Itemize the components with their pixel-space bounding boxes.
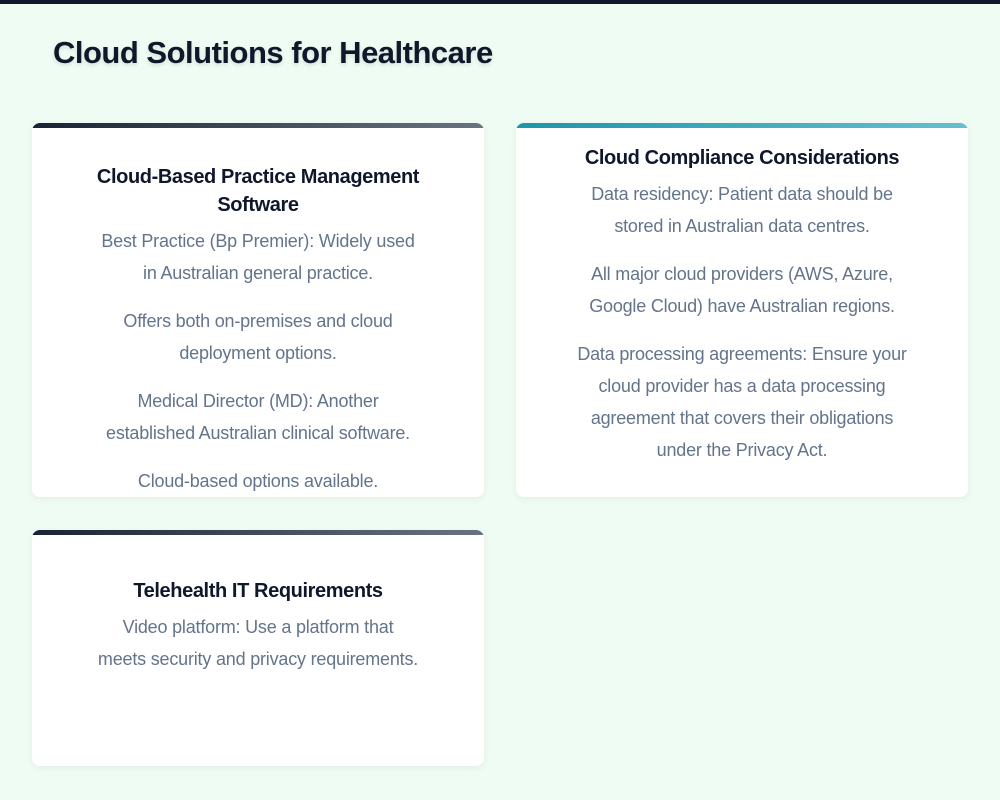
text: data residency: Data residency: Patient data should be — [591, 184, 893, 204]
heading: practice management: Cloud-Based Practice Management — [97, 166, 419, 188]
text: agreements: Data processing agreements: Ensure your — [577, 344, 907, 364]
panel: practice management — [32, 123, 484, 497]
heading: practice management — [97, 166, 420, 216]
title: Cloud Solutions for Healthcare — [53, 35, 493, 70]
text: Medical Director: Medical Director (MD): Another — [137, 391, 379, 411]
text: deployment: deployment options. — [179, 343, 337, 363]
text: video platform — [98, 617, 418, 669]
text: data residency — [591, 184, 893, 236]
text: Bp Premier — [101, 231, 415, 283]
text: cloud options: Cloud-based options available. — [138, 471, 378, 491]
text: data residency: stored in Australian data centres. — [614, 216, 870, 236]
text: deployment: Offers both on-premises and cloud — [123, 311, 393, 331]
panel: compliance — [516, 123, 968, 497]
text: video platform: Video platform: Use a platform that — [123, 617, 393, 637]
text: video platform: meets security and privacy requirements. — [98, 649, 418, 669]
text: Bp Premier: in Australian general practice. — [143, 263, 373, 283]
text: agreements — [577, 344, 907, 460]
text: providers: Google Cloud) have Australian regions. — [589, 296, 895, 316]
panel: telehealth — [32, 530, 484, 766]
text: Bp Premier: Best Practice (Bp Premier): Widely used — [101, 231, 415, 251]
text: Medical Director — [106, 391, 410, 443]
heading: telehealth: Telehealth IT Requirements — [133, 580, 383, 602]
text: agreements: agreement that covers their obligations — [591, 408, 893, 428]
heading: practice management: Software — [217, 194, 299, 216]
text: Medical Director: established Australian clinical software. — [106, 423, 410, 443]
text: agreements: under the Privacy Act. — [657, 440, 827, 460]
text: agreements: cloud provider has a data processing — [598, 376, 885, 396]
text: providers — [589, 264, 895, 316]
text: providers: All major cloud providers (AWS, Azure, — [591, 264, 893, 284]
heading: compliance: Cloud Compliance Considerations — [585, 147, 899, 169]
text: deployment — [123, 311, 393, 363]
